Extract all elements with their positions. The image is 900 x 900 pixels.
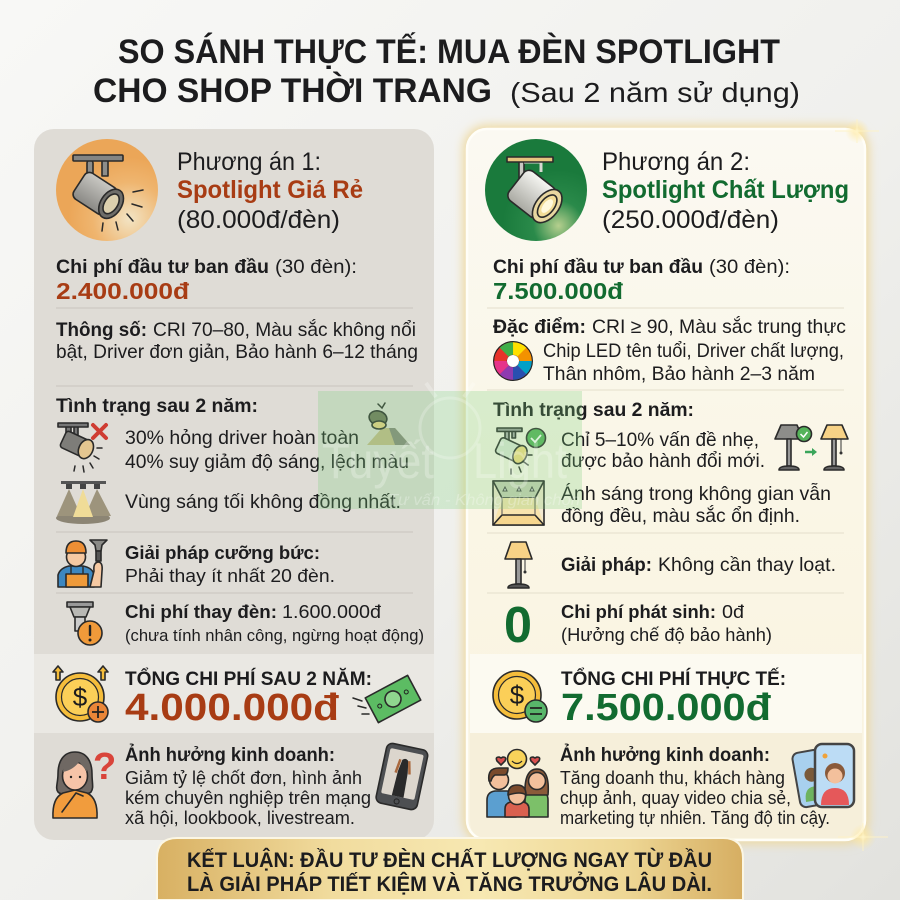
sparkle: bottom right bbox=[838, 823, 888, 851]
title: SO SÁNH THỰC TẾ: MUA ĐÈN SPOTLIGHT bbox=[118, 33, 780, 71]
icon: track lights uneven bbox=[56, 481, 111, 524]
conclusion banner bbox=[157, 838, 743, 900]
extra cost: (Hưởng chế độ bảo hành) bbox=[561, 624, 772, 645]
heading: option 2: (250.000đ/đèn) bbox=[602, 206, 779, 234]
solution bbox=[561, 554, 836, 576]
initial cost: (30 đèn): bbox=[275, 256, 357, 278]
icon: confused woman: ? bbox=[93, 746, 116, 788]
status text: failures: 30% hỏng driver hoàn toàn bbox=[125, 428, 359, 449]
icon: burnt lamp bbox=[367, 403, 410, 445]
forced solution: Giải pháp cưỡng bức: bbox=[125, 542, 320, 563]
icon: evenly lit room bbox=[493, 481, 544, 525]
specs: CRI 70–80, Màu sắc không nổi bbox=[153, 318, 416, 341]
band: total cost bbox=[470, 654, 862, 733]
features: CRI ≥ 90, Màu sắc trung thực bbox=[592, 315, 846, 338]
panel: option 1 budget spotlight bbox=[34, 129, 434, 840]
heading: option 1 bbox=[177, 148, 363, 234]
icon: coin with equals: $ bbox=[510, 680, 525, 710]
icon: coin with rising cost: $ bbox=[73, 682, 88, 712]
total cost: 4.000.000đ bbox=[125, 687, 340, 729]
initial cost: 2.400.000đ bbox=[56, 278, 189, 304]
extra cost: Chi phí phát sinh: bbox=[561, 601, 716, 622]
features: Chip LED tên tuổi, Driver chất lượng, bbox=[543, 340, 844, 362]
status text: uneven light: Vùng sáng tối không đồng nhất. bbox=[125, 492, 401, 513]
status text: minor issues bbox=[561, 429, 765, 472]
replacement cost: 1.600.000đ bbox=[282, 601, 382, 622]
icon: broken spotlight bbox=[58, 423, 106, 472]
status text: minor issues: được bảo hành đổi mới. bbox=[561, 450, 765, 472]
title: CHO SHOP THỜI TRANG bbox=[93, 72, 492, 110]
title bbox=[93, 33, 800, 110]
initial cost bbox=[493, 256, 790, 304]
business impact text: Ảnh hưởng kinh doanh: bbox=[125, 744, 335, 766]
icon: worker bbox=[58, 540, 107, 587]
icon: phones with customers bbox=[792, 744, 854, 808]
title: (Sau 2 năm sử dụng) bbox=[510, 77, 800, 108]
heading: status after 2 years: Tình trạng sau 2 năm: bbox=[56, 395, 258, 417]
replacement cost: (chưa tính nhân công, ngừng hoạt động) bbox=[125, 627, 424, 645]
icon: coin with rising cost bbox=[53, 666, 108, 722]
features: Đặc điểm: bbox=[493, 316, 586, 338]
heading: option 1: Spotlight Giá Rẻ bbox=[177, 176, 363, 204]
icon: cheap spotlight bbox=[56, 139, 158, 241]
business impact text: Ảnh hưởng kinh doanh: bbox=[560, 744, 770, 766]
heading: option 2: Phương án 2: bbox=[602, 148, 750, 176]
icon: flying money bbox=[353, 675, 421, 723]
business impact text: kém chuyên nghiệp trên mạng bbox=[125, 787, 371, 808]
icon: phone with lookbook photo bbox=[375, 742, 429, 811]
status text: failures bbox=[125, 428, 409, 473]
replacement cost: Chi phí thay đèn: bbox=[125, 601, 277, 622]
heading: option 1: (80.000đ/đèn) bbox=[177, 206, 340, 234]
business impact text: xã hội, lookbook, livestream. bbox=[125, 807, 355, 828]
total cost: 7.500.000đ bbox=[561, 687, 772, 729]
initial cost bbox=[56, 256, 357, 304]
conclusion banner: LÀ GIẢI PHÁP TIẾT KIỆM VÀ TĂNG TRƯỞNG LÂU DÀI. bbox=[187, 872, 712, 896]
business impact text bbox=[560, 744, 830, 828]
heading: status after 2 years: Tình trạng sau 2 năm: bbox=[493, 399, 694, 421]
watermark: Light bbox=[473, 433, 567, 489]
icon: coin with equals bbox=[493, 671, 547, 722]
solution: Giải pháp: bbox=[561, 554, 652, 576]
business impact text: chụp ảnh, quay video chia sẻ, bbox=[560, 787, 791, 808]
heading: option 1: Phương án 1: bbox=[177, 148, 321, 176]
business impact text: marketing tự nhiên. Tăng độ tin cậy. bbox=[560, 807, 830, 828]
features bbox=[493, 315, 846, 385]
icon: lamp swap bbox=[775, 425, 848, 470]
forced solution bbox=[125, 542, 335, 586]
status text: stable light bbox=[561, 482, 831, 527]
heading: option 2: Spotlight Chất Lượng bbox=[602, 176, 849, 204]
initial cost: 7.500.000đ bbox=[493, 278, 623, 304]
forced solution: Phải thay ít nhất 20 đèn. bbox=[125, 565, 335, 586]
solution: Không cần thay loạt. bbox=[658, 554, 836, 576]
sparkle: top right bbox=[835, 119, 879, 143]
icon: quality spotlight bbox=[485, 139, 587, 241]
extra cost: 0đ bbox=[722, 601, 745, 622]
specs: Thông số: bbox=[56, 319, 147, 341]
business impact text: Giảm tỷ lệ chốt đơn, hình ảnh bbox=[125, 767, 362, 788]
replacement cost bbox=[125, 601, 424, 645]
icon: colour wheel bbox=[493, 341, 533, 381]
icon: table lamp bbox=[505, 542, 532, 588]
initial cost: Chi phí đầu tư ban đầu bbox=[56, 256, 269, 278]
specs bbox=[56, 318, 418, 363]
specs: bật, Driver đơn giản, Bảo hành 6–12 tháng bbox=[56, 341, 418, 363]
initial cost: Chi phí đầu tư ban đầu bbox=[493, 256, 703, 278]
panel: option 2 quality spotlight bbox=[463, 125, 869, 844]
business impact text: Tăng doanh thu, khách hàng bbox=[560, 767, 785, 788]
extra cost bbox=[561, 601, 772, 645]
icon: confused woman bbox=[53, 746, 116, 818]
total cost: TỔNG CHI PHÍ SAU 2 NĂM: bbox=[125, 668, 372, 690]
band: business impact bbox=[470, 733, 862, 838]
total cost bbox=[125, 668, 372, 729]
big zero: 0 bbox=[504, 596, 532, 653]
status text: minor issues: Chỉ 5–10% vấn đề nhẹ, bbox=[561, 429, 759, 451]
status text: failures: 40% suy giảm độ sáng, lệch màu bbox=[125, 452, 409, 473]
total cost: TỔNG CHI PHÍ THỰC TẾ: bbox=[561, 668, 786, 690]
features: Thân nhôm, Bảo hành 2–3 năm bbox=[543, 363, 815, 385]
icon: good spotlight bbox=[494, 428, 546, 474]
conclusion banner: KẾT LUẬN: ĐẦU TƯ ĐÈN CHẤT LƯỢNG NGAY TỪ ĐẦU bbox=[187, 848, 712, 872]
icon: replacement warning bbox=[67, 602, 102, 645]
business impact text bbox=[125, 744, 371, 828]
watermark bbox=[318, 383, 582, 509]
status text: stable light: Ánh sáng trong không gian vẫn bbox=[561, 482, 831, 505]
watermark: Tư vấn - Không gian chọn bbox=[388, 492, 580, 509]
watermark: Tuyết bbox=[322, 433, 434, 489]
status text: stable light: đồng đều, màu sắc ổn định. bbox=[561, 504, 800, 527]
heading: option 2 bbox=[602, 148, 849, 234]
initial cost: (30 đèn): bbox=[709, 256, 790, 278]
icon: happy family bbox=[487, 750, 548, 817]
band: total cost bbox=[34, 654, 434, 733]
total cost bbox=[561, 668, 786, 729]
